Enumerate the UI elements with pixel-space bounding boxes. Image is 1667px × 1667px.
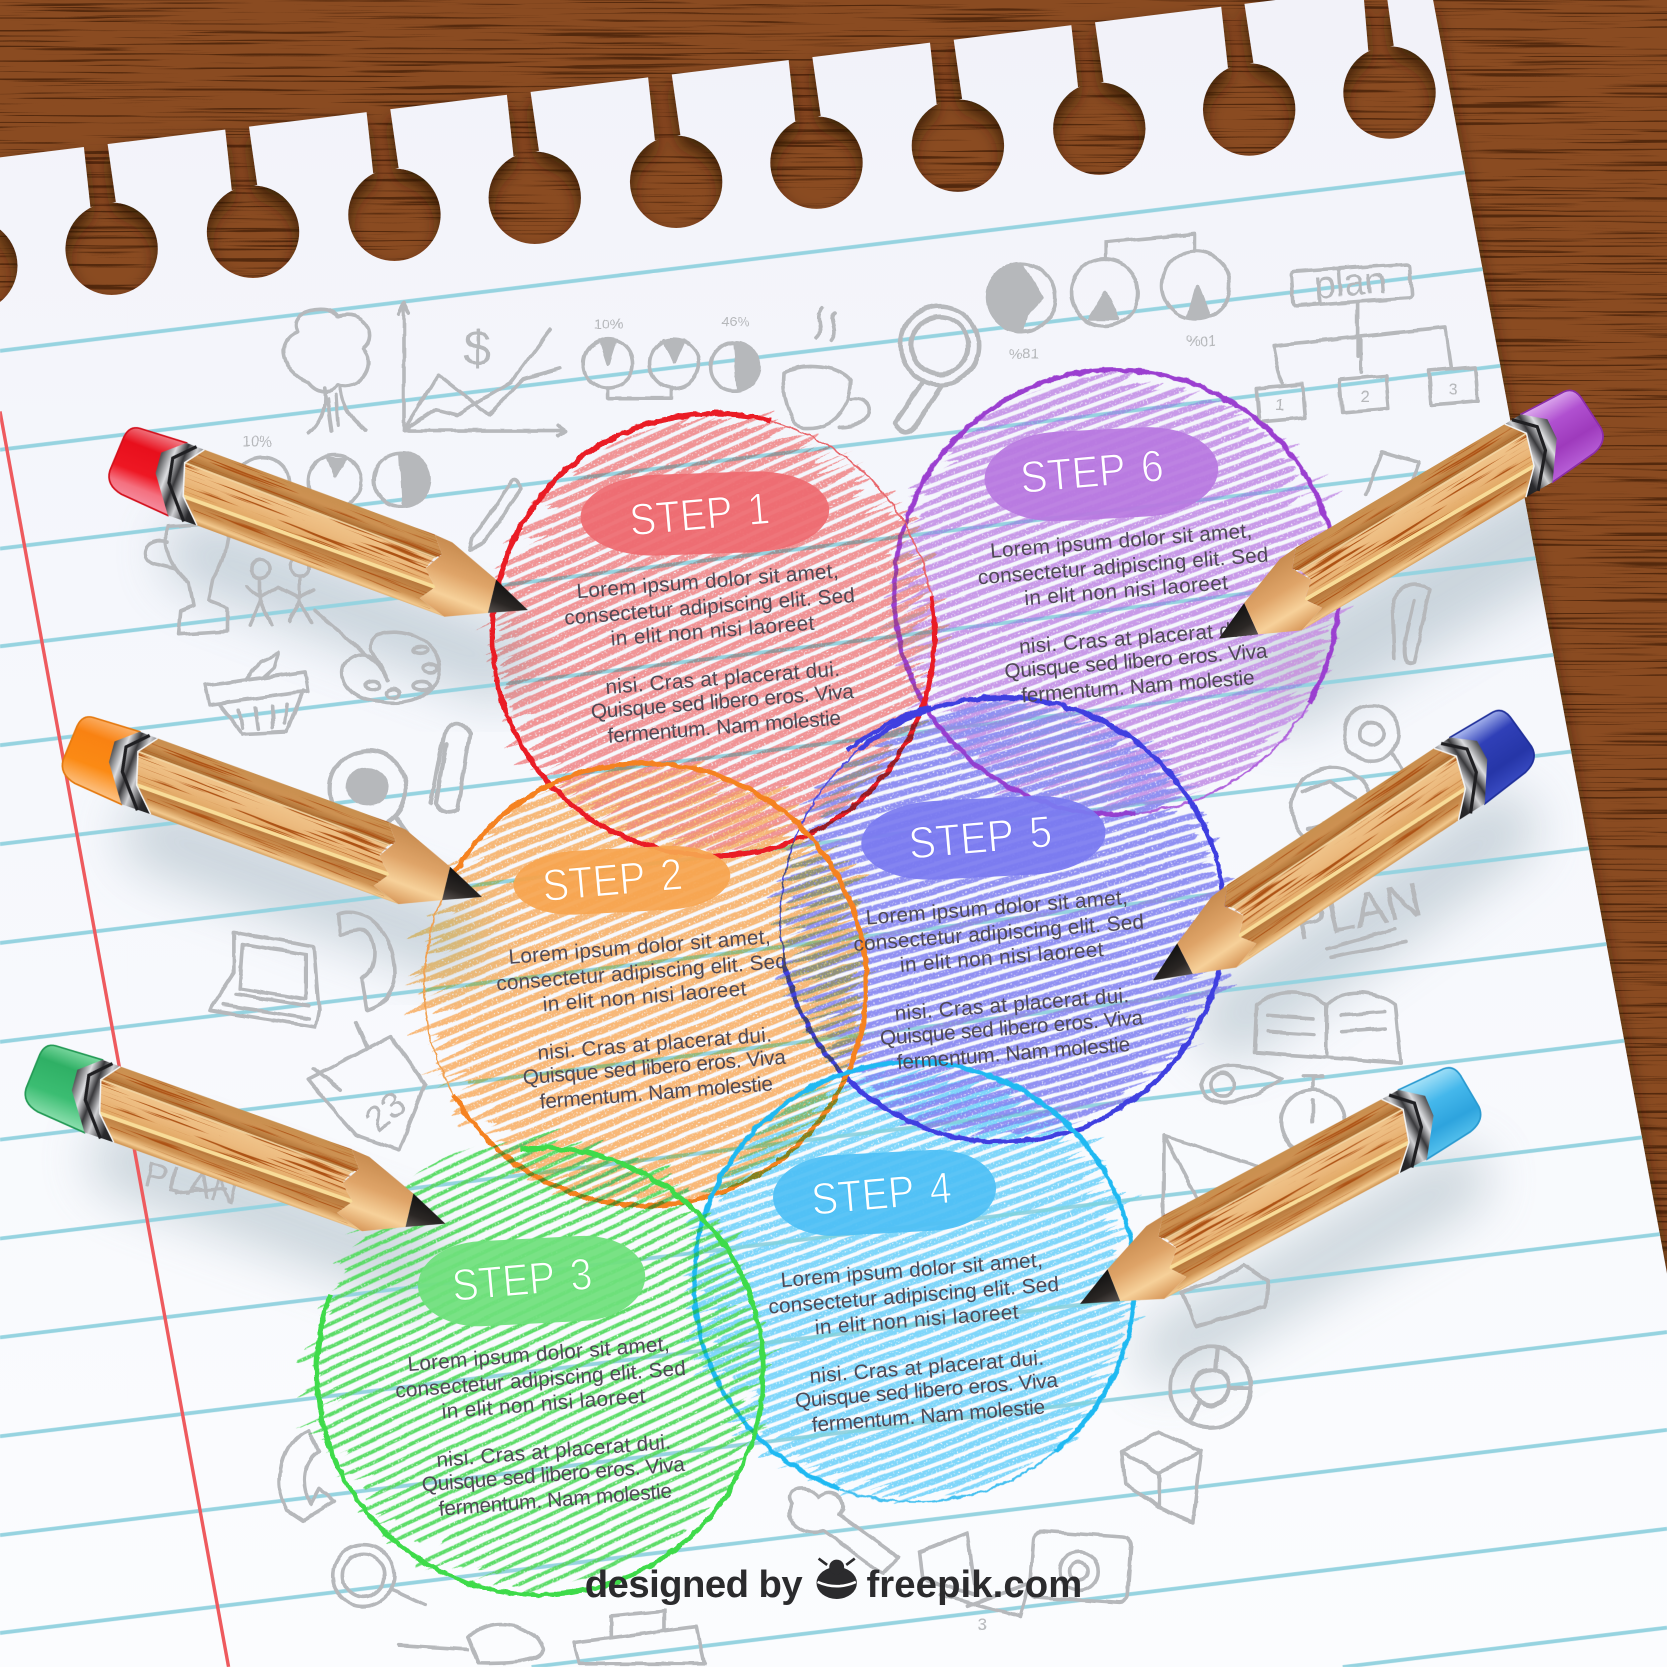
watermark: designed by freepik.com: designed by <box>585 1563 803 1606</box>
heading pill: step 4: STEP 4 <box>809 1164 954 1225</box>
text block: step 4: Lorem ipsum dolor sit amet, <box>780 1249 1043 1292</box>
panel: step 5 blue scribble circle <box>734 651 1271 1188</box>
doodle: left pies: 10% <box>242 435 272 451</box>
text block: step 2: nisi. Cras at placerat dui. <box>537 1023 773 1065</box>
doodle: paperclip right <box>1393 584 1430 662</box>
text block: step 1: Lorem ipsum dolor sit amet, <box>576 560 839 603</box>
doodle: stopwatch <box>1281 1076 1345 1154</box>
doodle: phone arrow <box>338 912 395 1010</box>
text block: step 5: Lorem ipsum dolor sit amet, <box>865 886 1129 930</box>
heading pill: step 6: STEP 6 <box>1018 442 1166 503</box>
doodle: plan flowchart: 3 <box>1449 379 1458 398</box>
doodle: handwritten plan right: PLAN <box>1290 872 1426 952</box>
doodle: line chart: $ <box>464 322 491 376</box>
doodle: location pin <box>1344 706 1405 776</box>
text block: step 3: fermentum. Nam molestie <box>438 1480 673 1521</box>
text block: step 3 <box>392 1331 696 1523</box>
heading pill: step 4 <box>771 1147 998 1239</box>
heading pill: step 2 <box>512 843 732 918</box>
text block: step 1: Quisque sed libero eros. Viva <box>590 680 855 724</box>
panel: step 2 orange scribble circle <box>362 701 929 1268</box>
doodle: thumbs hand <box>1182 1265 1267 1326</box>
icon: orange pencil <box>56 707 495 935</box>
doodle icons <box>141 234 1478 1664</box>
doodle: three pies <box>584 313 759 399</box>
doodle: magnifier and paperclip <box>330 723 470 851</box>
text block: step 4: in elit non nisi laoreet <box>814 1301 1020 1340</box>
text block: step 2: in elit non nisi laoreet <box>542 977 747 1016</box>
doodle: tree <box>284 310 370 434</box>
text block: step 2: fermentum. Nam molestie <box>539 1072 774 1114</box>
doodle: calendar: 23 <box>356 1083 414 1140</box>
text block: step 6: nisi. Cras at placerat dui. <box>1018 617 1254 659</box>
icon: freepik mascot <box>816 1559 857 1599</box>
doodle: numbered boxes <box>920 1533 1029 1634</box>
text block: step 5 <box>851 885 1154 1077</box>
doodle: stick people <box>247 557 315 625</box>
heading pill: step 2: STEP 2 <box>540 850 685 911</box>
panel: step 6 purple scribble circle <box>838 314 1394 870</box>
icon: blue pencil <box>1132 700 1543 1014</box>
icon: cyan pencil <box>1062 1057 1489 1339</box>
icon: purple pencil <box>1199 380 1612 673</box>
doodle: handwritten plan left: PLAN <box>141 1153 242 1213</box>
watermark: designed by freepik.com <box>585 1559 1082 1606</box>
doodle: brush and palette <box>315 610 440 703</box>
doodle: numbered boxes: 3 <box>978 1615 987 1634</box>
doodle: plan flowchart <box>1256 259 1478 422</box>
text block: step 1: nisi. Cras at placerat dui. <box>605 658 841 699</box>
text block: step 4 <box>766 1247 1069 1440</box>
text block: step 3: nisi. Cras at placerat dui. <box>436 1431 672 1472</box>
doodle: bottom magnifier <box>333 1545 425 1606</box>
doodle: chef hat <box>790 1489 898 1573</box>
doodle: bottom palette <box>399 1624 542 1663</box>
text block: step 3: in elit non nisi laoreet <box>441 1385 646 1424</box>
text block: step 3: Lorem ipsum dolor sit amet, <box>407 1333 670 1376</box>
doodle: donut chart <box>1171 1347 1251 1428</box>
doodle: envelope <box>1163 1135 1261 1255</box>
doodle: phone bottom left <box>280 1430 335 1520</box>
text block: step 5: consectetur adipiscing elit. Sed <box>853 910 1145 956</box>
doodle: coffee cup <box>783 308 869 429</box>
text block: step 6: consectetur adipiscing elit. Sed <box>977 544 1269 589</box>
text block: step 2: consectetur adipiscing elit. Sed <box>495 950 788 995</box>
text block: step 5: in elit non nisi laoreet <box>899 938 1105 977</box>
doodle: basket <box>205 653 308 734</box>
heading pill: step 6 <box>982 423 1221 525</box>
pencil shadows on paper <box>128 510 1573 1350</box>
doodle: laptop <box>209 932 319 1027</box>
heading pill: step 3 <box>416 1233 647 1330</box>
panel: step 4 cyan scribble circle <box>639 1007 1190 1557</box>
doodle: line chart <box>399 303 566 436</box>
doodle: three pies: 46% <box>722 313 750 329</box>
text block: step 6 <box>975 518 1279 710</box>
heading pill: step 5 <box>859 792 1108 883</box>
text block: step 5: Quisque sed libero eros. Viva <box>879 1006 1144 1050</box>
heading pill: step 1 <box>579 469 831 558</box>
doodle: briefcase <box>574 1611 704 1664</box>
text block: step 5: fermentum. Nam molestie <box>896 1033 1131 1074</box>
doodle: cube <box>1122 1432 1201 1522</box>
doodle: top pies: %81 <box>1009 346 1039 362</box>
text block: step 4: Quisque sed libero eros. Viva <box>794 1369 1059 1413</box>
panel: step 3 green scribble circle <box>240 1064 834 1658</box>
text block: step 1: fermentum. Nam molestie <box>607 707 842 748</box>
text block: step 4: consectetur adipiscing elit. Sed <box>768 1273 1060 1319</box>
icon: red pencil <box>102 418 541 648</box>
text block: step 1: consectetur adipiscing elit. Sed <box>563 584 856 630</box>
doodle: paint brush top right <box>1366 452 1419 500</box>
doodle: three pies: 10% <box>594 316 622 332</box>
doodle: target tag <box>1201 1066 1281 1102</box>
doodle: top pies: %01 <box>1186 334 1216 350</box>
text block: step 3: Quisque sed libero eros. Viva <box>421 1453 686 1497</box>
text block: step 6: fermentum. Nam molestie <box>1020 666 1255 708</box>
doodle: plan flowchart: 1 <box>1275 395 1285 414</box>
text block: step 5: nisi. Cras at placerat dui. <box>894 984 1130 1025</box>
text block: step 3: consectetur adipiscing elit. Sed <box>394 1357 687 1403</box>
doodle: open book <box>1255 992 1401 1063</box>
doodle: plan flowchart: 2 <box>1360 387 1370 406</box>
heading pill: step 5: STEP 5 <box>907 807 1054 869</box>
text block: step 6: in elit non nisi laoreet <box>1023 571 1229 610</box>
text block: step 4: fermentum. Nam molestie <box>811 1396 1046 1437</box>
text block: step 1 <box>561 559 865 751</box>
icon: green pencil <box>19 1035 458 1262</box>
heading pill: step 3: STEP 3 <box>450 1250 594 1311</box>
text block: step 2 <box>493 924 797 1116</box>
doodle: magnifying glass <box>895 306 979 432</box>
doodle: plan flowchart: plan <box>1312 259 1388 307</box>
heading pill: step 1: STEP 1 <box>628 484 772 545</box>
text block: step 1: in elit non nisi laoreet <box>610 612 815 651</box>
doodle: calendar <box>308 1023 425 1150</box>
text block: step 6: Lorem ipsum dolor sit amet, <box>989 519 1253 563</box>
doodle: left pies <box>236 435 429 510</box>
panel: step 1 red scribble circle <box>430 351 997 918</box>
text block: step 2: Quisque sed libero eros. Viva <box>522 1046 787 1089</box>
doodle: top pies <box>988 234 1230 362</box>
doodle: trophy <box>145 523 229 635</box>
watermark: designed by freepik.com: freepik.com <box>866 1563 1082 1606</box>
doodle: camera <box>1029 1531 1131 1603</box>
text block: step 2: Lorem ipsum dolor sit amet, <box>508 925 771 969</box>
text block: step 4: nisi. Cras at placerat dui. <box>809 1347 1045 1388</box>
doodle: globe <box>1292 768 1373 848</box>
text block: step 6: Quisque sed libero eros. Viva <box>1004 640 1269 683</box>
doodle: pencil sketch <box>470 479 521 550</box>
